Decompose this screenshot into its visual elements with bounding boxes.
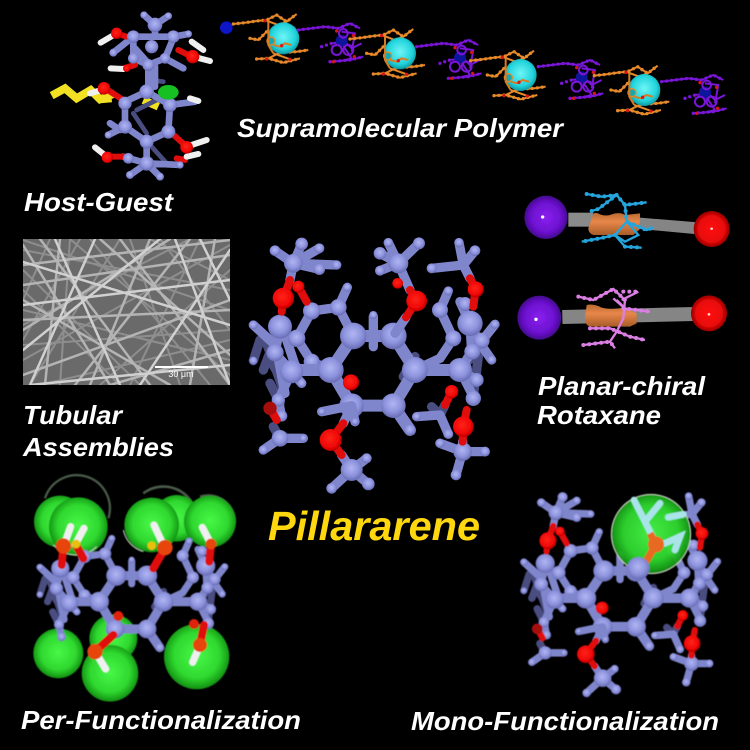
oxygen and hydrogen substituents — [56, 525, 216, 669]
heading: Per-Functionalization: Per-Functionalization — [21, 705, 301, 735]
guest chain — [52, 88, 158, 107]
panel: per-functionalized molecule — [33, 475, 236, 702]
end cap atom — [220, 21, 233, 34]
panel: planar-chiral rotaxane pair — [517, 194, 730, 348]
title: Pillararene: Pillararene — [268, 503, 480, 549]
rotaxane with pink ring — [517, 289, 727, 348]
host molecule — [90, 11, 210, 181]
scale bar — [155, 366, 208, 368]
guest halide atom — [158, 85, 179, 100]
green halide spheres — [33, 475, 236, 702]
polymer repeat units — [233, 14, 727, 115]
scale label: 30 μm — [168, 369, 194, 379]
heading: Planar-chiral Rotaxane: Rotaxane — [537, 400, 661, 430]
heading: Supramolecular Polymer: Supramolecular Polymer — [237, 113, 565, 143]
heading: Tubular Assemblies: Tubular — [23, 400, 124, 430]
panel: SEM image of tubular assemblies — [23, 239, 230, 385]
molecular core with methoxy groups — [520, 492, 721, 697]
heading: Planar-chiral Rotaxane: Planar-chiral — [538, 371, 706, 401]
heading: Tubular Assemblies: Assemblies — [22, 432, 174, 462]
rotaxane with blue ring — [524, 194, 730, 248]
panel: supramolecular polymer chain — [220, 14, 727, 115]
heading: Mono-Functionalization: Mono-Functionalization — [411, 706, 719, 736]
panel: central pillararene molecule — [249, 237, 499, 494]
panel: mono-functionalized molecule — [520, 492, 721, 697]
molecular core — [37, 535, 228, 652]
functional group in green sphere — [611, 494, 691, 580]
heading: Host-Guest: Host-Guest — [24, 187, 174, 217]
panel: host-guest molecule — [52, 11, 210, 181]
